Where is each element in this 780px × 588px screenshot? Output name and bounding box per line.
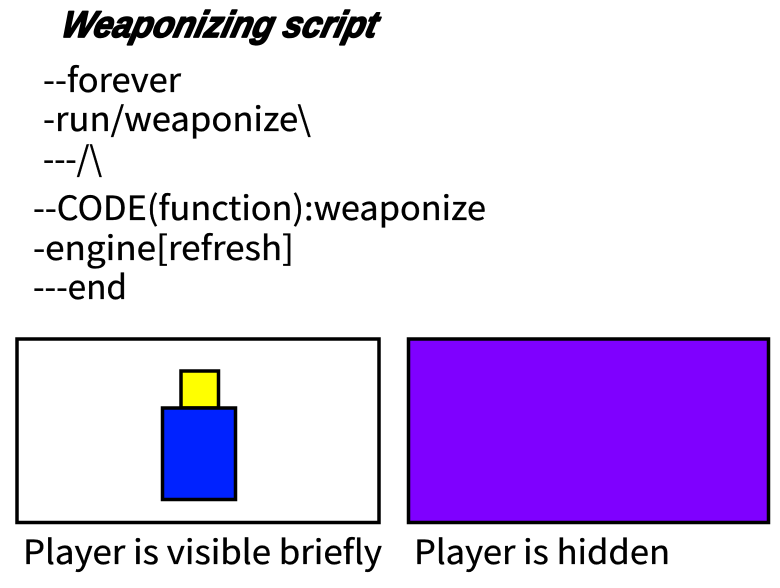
text block: forever loop: ---/\ — [43, 132, 102, 181]
text block: weaponize function: ---end — [33, 260, 127, 309]
text block: weaponize function: -engine[refresh] — [33, 221, 294, 270]
text block: weaponize function — [33, 181, 486, 309]
text block: weaponize function: --CODE(function):weaponize — [33, 181, 486, 230]
caption: player hidden: Player is hidden — [414, 525, 670, 574]
panel: player visible — [17, 339, 379, 522]
icon: player body — [162, 408, 236, 500]
title: Weaponizing script — [58, 4, 385, 45]
panel: player hidden — [408, 339, 768, 522]
text block: forever loop: -run/weaponize\ — [43, 92, 311, 141]
text block: forever loop — [43, 53, 311, 181]
text block: forever loop: --forever — [43, 53, 182, 102]
icon: player head — [181, 371, 218, 408]
caption: player visible: Player is visible briefly — [23, 525, 382, 574]
